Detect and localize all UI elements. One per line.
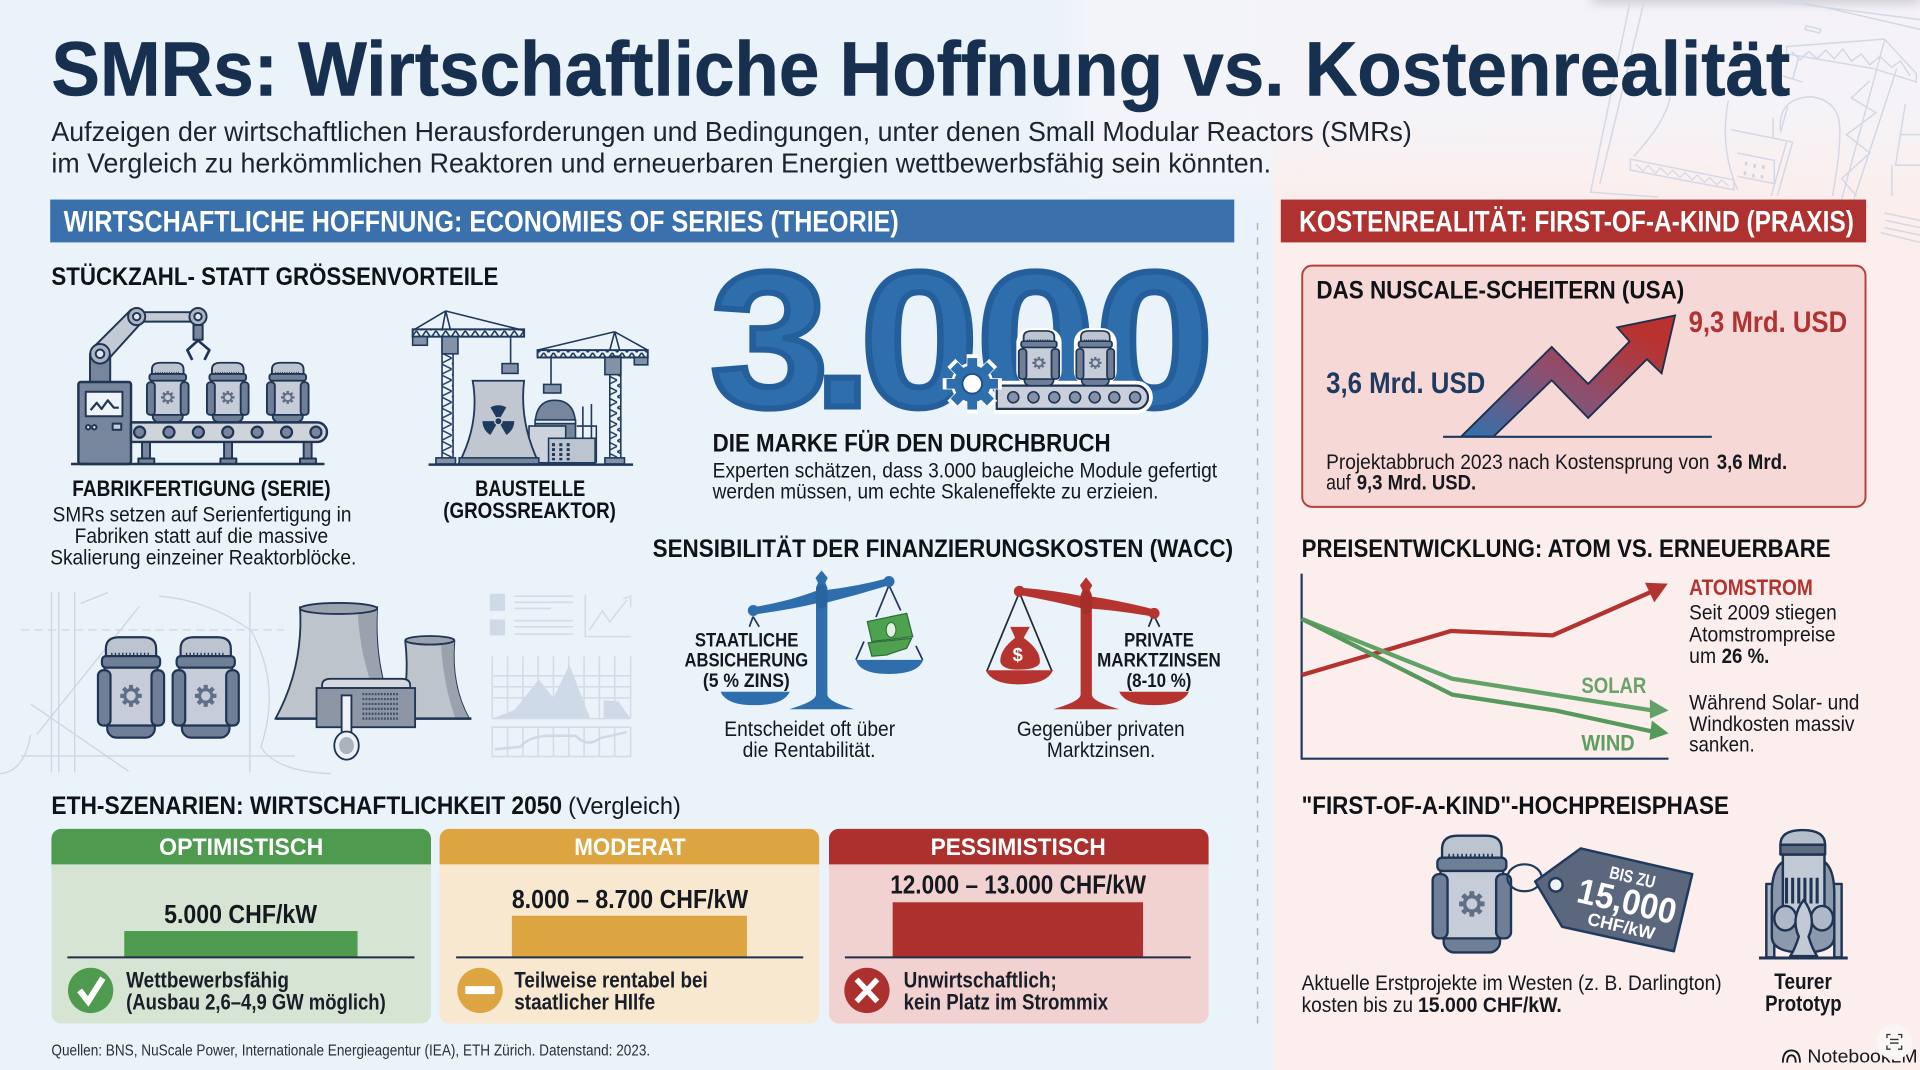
panel: NuScale: 3,6 Mrd. USD	[1326, 367, 1485, 400]
panel: NuScale: 9,3 Mrd. USD.	[1357, 472, 1476, 495]
label: Teurer Prototyp: Teurer	[1774, 969, 1832, 994]
label: Baustelle: (GROSSREAKTOR)	[443, 498, 616, 523]
icon: reactor with price tag: BIS ZU	[1608, 862, 1657, 892]
caption: Gegenüber: Gegenüber privaten	[1017, 718, 1185, 741]
card: pessimistisch: 12.000 – 13.000 CHF/kW	[890, 872, 1147, 900]
label: Baustelle: BAUSTELLE	[475, 476, 585, 501]
label: private Marktzinsen: MARKTZINSEN	[1097, 651, 1221, 672]
icon: reactor with price tag: 15,000	[1574, 870, 1680, 932]
section header: Kostenrealität	[1281, 200, 1866, 242]
icon: factory conveyor with robot arm	[71, 308, 327, 464]
section header: Wirtschaftliche Hoffnung: WIRTSCHAFTLICHE HOFFNUNG: ECONOMIES OF SERIES (THEORIE)	[64, 205, 899, 238]
heading: ETH-Szenarien: (Vergleich)	[568, 793, 681, 820]
label: private Marktzinsen: (8-10 %)	[1127, 671, 1191, 692]
panel: NuScale: DAS NUSCALE-SCHEITERN (USA)	[1316, 277, 1684, 305]
panel: NuScale: 9,3 Mrd. USD	[1689, 306, 1847, 339]
watermark: NotebookLM: NotebookLM	[1807, 1046, 1918, 1067]
line chart: Atom vs. Erneuerbare	[1302, 574, 1669, 759]
heading: ETH-Szenarien: ETH-SZENARIEN: WIRTSCHAFTLICHKEIT 2050	[51, 792, 562, 820]
card: moderat: Teilweise rentabel bei	[514, 967, 708, 992]
text: Erstprojekte: kosten bis zu	[1302, 993, 1413, 1017]
label: Fabrikfertigung	[50, 476, 356, 569]
label: private Marktzinsen	[1097, 630, 1221, 692]
label: Fabrikfertigung: Fabriken statt auf die massive	[75, 525, 328, 548]
chart note: Solar und Wind: sanken.	[1689, 734, 1755, 757]
heading and text: Die Marke: werden müssen, um echte Skaleneffekte zu erzieien.	[712, 480, 1158, 503]
card: optimistisch: (Ausbau 2,6–4,9 GW möglich)	[126, 989, 386, 1014]
caption: Gegenüber: Marktzinsen.	[1047, 739, 1155, 762]
caption: Gegenüber	[1017, 718, 1185, 762]
label: Fabrikfertigung: FABRIKFERTIGUNG (SERIE)	[72, 476, 331, 501]
chart note: Solar und Wind: Während Solar- und	[1689, 691, 1859, 714]
label: Baustelle	[443, 476, 616, 523]
section header: Wirtschaftliche Hoffnung	[50, 200, 1234, 242]
title: SMRs: Wirtschaftliche Hoffnung vs. Kostenrealität	[51, 26, 1790, 112]
card: optimistisch: 5.000 CHF/kW	[164, 901, 318, 929]
heading: Preisentwicklung: PREISENTWICKLUNG: ATOM VS. ERNEUERBARE	[1302, 535, 1831, 563]
card: pessimistisch	[829, 829, 1209, 1023]
panel: NuScale	[1302, 266, 1866, 507]
text: Erstprojekte: Aktuelle Erstprojekte im Westen (z. B. Darlington)	[1302, 971, 1722, 995]
card: optimistisch: Wettbewerbsfähig	[126, 967, 289, 992]
card: moderat: staatlicher HIlfe	[514, 989, 655, 1014]
heading: WACC: SENSIBILITÄT DER FINANZIERUNGSKOSTEN (WACC)	[653, 535, 1233, 563]
icon: construction site with cranes	[413, 311, 648, 465]
label: Teurer Prototyp	[1765, 969, 1842, 1016]
card: moderat	[440, 829, 819, 1023]
caption: Entscheidet: Entscheidet oft über	[724, 718, 895, 741]
illustration: blueprint, modules and cooling towers	[0, 593, 631, 774]
card: moderat: 8.000 – 8.700 CHF/kW	[512, 886, 749, 914]
text: Erstprojekte	[1302, 971, 1722, 1017]
panel: NuScale: auf	[1326, 472, 1351, 495]
line chart: Atom vs. Erneuerbare: SOLAR	[1581, 673, 1646, 698]
chart note: Solar und Wind	[1689, 691, 1859, 757]
card: pessimistisch: PESSIMISTISCH	[931, 834, 1106, 861]
label: staatliche Absicherung: STAATLICHE	[695, 630, 798, 651]
chart note: Atomstrom: um	[1689, 645, 1716, 668]
heading: First-of-a-kind: "FIRST-OF-A-KIND"-HOCHPREISPHASE	[1302, 792, 1729, 820]
text: Erstprojekte: 15.000 CHF/kW.	[1418, 993, 1562, 1017]
icon: reactor with price tag: CHF/kW	[1586, 909, 1657, 944]
heading: Stückzahl: STÜCKZAHL- STATT GRÖSSENVORTEILE	[51, 262, 498, 291]
subtitle	[51, 116, 1412, 179]
heading and text: Die Marke	[712, 429, 1217, 503]
line chart: Atom vs. Erneuerbare: WIND	[1581, 730, 1635, 755]
panel: NuScale: Projektabbruch 2023 nach Kostensprung von	[1326, 451, 1709, 474]
card: optimistisch: OPTIMISTISCH	[159, 834, 323, 861]
subtitle: im Vergleich zu herkömmlichen Reaktoren und erneuerbaren Energien wettbewerbsfähig sein könnten.	[51, 148, 1271, 179]
label: staatliche Absicherung	[684, 630, 808, 692]
card: optimistisch	[51, 829, 431, 1023]
sources: Quellen: BNS, NuScale Power, Internationale Energieagentur (IEA), ETH Zürich. Datenstand: 2023.	[51, 1042, 650, 1059]
chart note: Atomstrom: Atomstrompreise	[1689, 624, 1836, 647]
icon: prototype reactor	[1759, 830, 1848, 958]
card: pessimistisch: kein Platz im Strommix	[904, 989, 1109, 1014]
icon: blue balance scale	[721, 571, 923, 709]
chart note: Atomstrom: Seit 2009 stiegen	[1689, 601, 1837, 624]
panel: NuScale: 3,6 Mrd.	[1717, 451, 1787, 474]
chart note: Solar und Wind: Windkosten massiv	[1689, 713, 1855, 736]
card: pessimistisch: Unwirtschaftlich;	[904, 967, 1057, 992]
chart note: Atomstrom: ATOMSTROM	[1689, 575, 1813, 600]
label: Fabrikfertigung: Skalierung einzeiner Reaktorblöcke.	[50, 546, 356, 569]
label: private Marktzinsen: PRIVATE	[1124, 630, 1194, 651]
caption: Entscheidet	[724, 718, 895, 762]
heading and text: Die Marke: Experten schätzen, dass 3.000 baugleiche Module gefertigt	[713, 459, 1217, 482]
subtitle: Aufzeigen der wirtschaftlichen Herausforderungen und Bedingungen, unter denen Small Modular Reactors (SMRs)	[51, 116, 1412, 147]
card: moderat: MODERAT	[574, 834, 686, 861]
caption: Entscheidet: die Rentabilität.	[743, 739, 876, 762]
heading and text: Die Marke: DIE MARKE FÜR DEN DURCHBRUCH	[713, 429, 1111, 458]
chart note: Atomstrom: 26 %.	[1722, 645, 1769, 668]
icon: red balance scale	[986, 577, 1189, 709]
big number 3.000: 3.000	[710, 232, 1214, 448]
icon: reactor with price tag	[1433, 836, 1692, 952]
icon: floating scan button	[1877, 1024, 1912, 1060]
label: staatliche Absicherung: ABSICHERUNG	[684, 651, 808, 672]
icon: gear with conveyor and modules	[943, 328, 1150, 413]
chart note: Atomstrom	[1689, 575, 1837, 668]
icon: red balance scale: $	[1013, 644, 1023, 665]
label: Fabrikfertigung: SMRs setzen auf Serienfertigung in	[53, 504, 351, 527]
label: Teurer Prototyp: Prototyp	[1765, 991, 1842, 1016]
label: staatliche Absicherung: (5 % ZINS)	[703, 671, 790, 692]
